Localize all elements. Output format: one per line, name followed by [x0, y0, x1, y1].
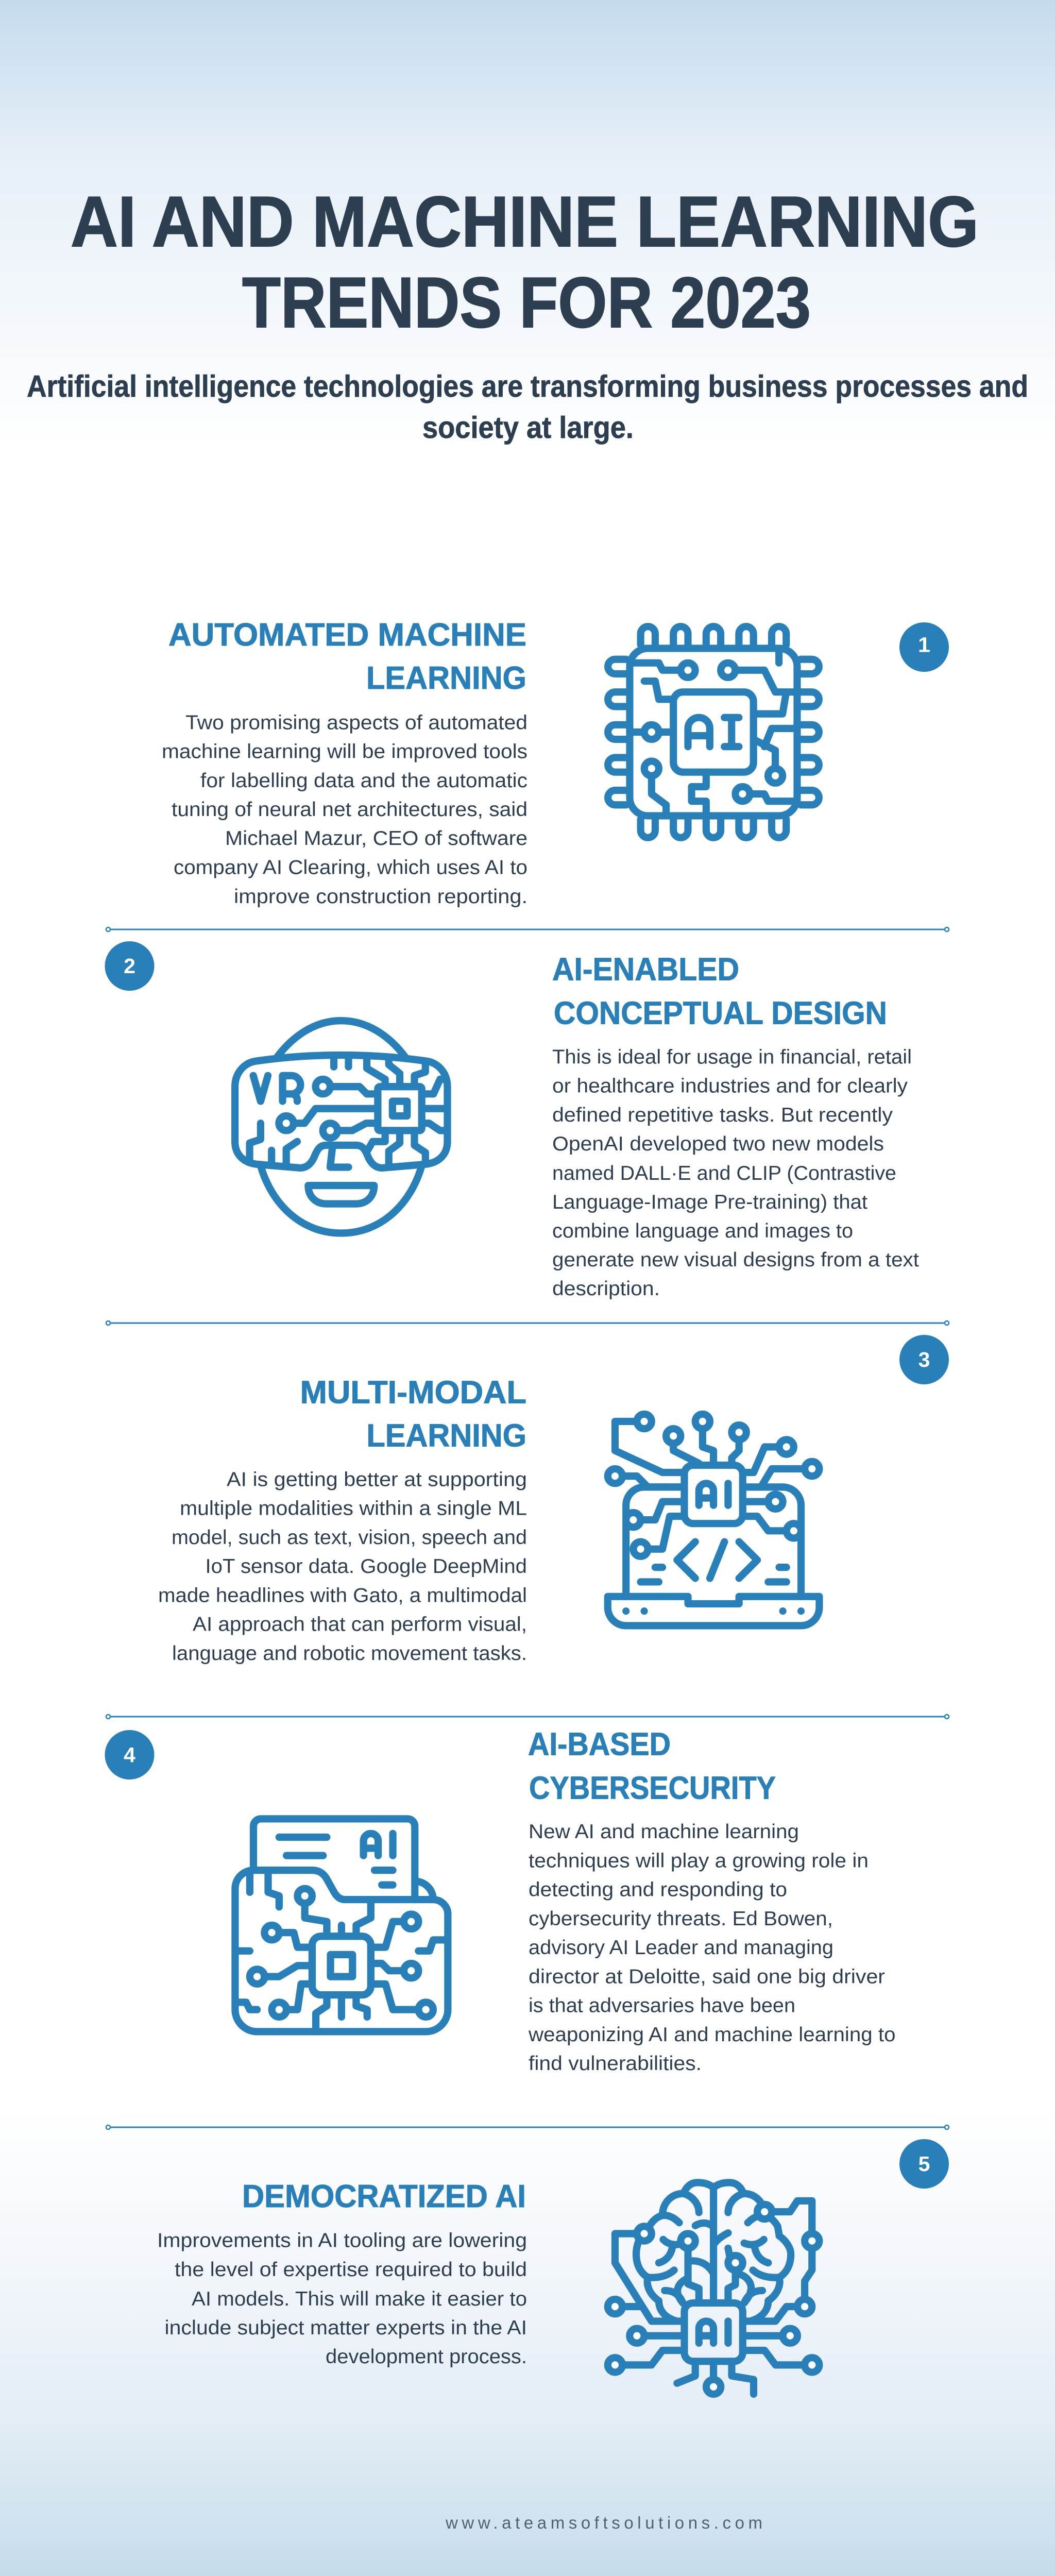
body text 4: techniques will play a growing role in — [529, 1850, 869, 1872]
body text 5: development process. — [326, 2346, 527, 2368]
heading 3 — [300, 1375, 526, 1454]
heading 2 — [552, 952, 887, 1031]
panel: democratized AI — [157, 2139, 949, 2394]
number badge 2: 2 — [124, 954, 135, 978]
subtitle — [27, 369, 1028, 445]
panel: AI-based cybersecurity — [105, 1727, 895, 2075]
body text 3: multiple modalities within a single ML — [180, 1497, 527, 1520]
body text 4: find vulnerabilities. — [529, 2053, 702, 2075]
number badge 5: 5 — [918, 2152, 930, 2176]
body text 3: made headlines with Gato, a multimodal — [158, 1585, 527, 1606]
title — [71, 182, 979, 343]
body text 4: is that adversaries have been — [529, 1995, 795, 2016]
divider 2 — [106, 1321, 949, 1325]
heading 4: AI-BASED — [528, 1727, 671, 1762]
icon: AI laptop — [608, 1414, 819, 1625]
number badge 3 — [899, 1335, 949, 1384]
body text 4: advisory AI Leader and managing — [529, 1937, 833, 1959]
body text 5 — [157, 2230, 527, 2368]
body text 1 — [162, 712, 528, 908]
panel: multi-modal learning — [158, 1335, 949, 1665]
number badge 4 — [105, 1730, 155, 1780]
body text 2: This is ideal for usage in financial, retail — [552, 1046, 912, 1069]
icon: AI folder — [235, 1819, 448, 2031]
body text 1: company AI Clearing, which uses AI to — [174, 856, 528, 879]
number badge 1: 1 — [918, 633, 930, 656]
number badge 3: 3 — [918, 1348, 930, 1371]
divider 3 — [106, 1715, 949, 1719]
body text 2: named DALL·E and CLIP (Contrastive — [552, 1162, 896, 1184]
subtitle: society at large. — [422, 411, 634, 445]
body text 4 — [528, 1821, 895, 2075]
icon: AI chip — [608, 626, 819, 838]
icon: AI brain — [608, 2182, 819, 2394]
title: TRENDS FOR 2023 — [242, 263, 811, 343]
body text 2: generate new visual designs from a text — [552, 1249, 919, 1271]
heading 3: MULTI-MODAL — [300, 1375, 526, 1411]
body text 2: or healthcare industries and for clearly — [552, 1075, 908, 1097]
body text 2: description. — [552, 1278, 660, 1300]
divider 1 — [106, 927, 949, 931]
heading 4 — [528, 1727, 776, 1806]
body text 1: Michael Mazur, CEO of software — [225, 827, 528, 850]
body text 4: detecting and responding to — [529, 1878, 787, 1901]
body text 1: tuning of neural net architectures, said — [172, 799, 528, 821]
footer website: www.ateamsoftsolutions.com — [445, 2513, 762, 2532]
body text 5: Improvements in AI tooling are lowering — [157, 2230, 527, 2251]
body text 3: model, such as text, vision, speech and — [172, 1527, 527, 1549]
icon: VR headset face — [235, 1021, 447, 1233]
body text 3 — [158, 1468, 527, 1665]
body text 2 — [552, 1046, 919, 1300]
body text 2: Language-Image Pre-training) that — [552, 1191, 867, 1213]
body text 4: weaponizing AI and machine learning to — [528, 2024, 895, 2046]
body text 5: include subject matter experts in the AI — [165, 2317, 527, 2339]
heading 2: CONCEPTUAL DESIGN — [554, 995, 887, 1031]
divider 4 — [106, 2125, 949, 2129]
heading 4: CYBERSECURITY — [529, 1770, 776, 1806]
body text 2: combine language and images to — [552, 1220, 853, 1242]
heading 3: LEARNING — [367, 1418, 526, 1454]
number badge 4: 4 — [124, 1743, 135, 1767]
body text 2: OpenAI developed two new models — [552, 1133, 884, 1155]
number badge 5 — [899, 2139, 949, 2189]
heading 5: DEMOCRATIZED AI — [242, 2179, 526, 2214]
heading 1 — [168, 617, 526, 696]
title: AI AND MACHINE LEARNING — [71, 182, 979, 262]
body text 5: the level of expertise required to build — [175, 2259, 527, 2281]
body text 1: machine learning will be improved tools — [162, 741, 528, 762]
body text 4: director at Deloitte, said one big driver — [529, 1966, 885, 1988]
panel: automated machine learning — [162, 617, 949, 908]
panel: AI-enabled conceptual design — [105, 941, 919, 1300]
body text 2: defined repetitive tasks. But recently — [552, 1104, 893, 1126]
body text 1: improve construction reporting. — [234, 886, 528, 908]
body text 1: Two promising aspects of automated — [185, 712, 528, 734]
heading 2: AI-ENABLED — [552, 952, 739, 987]
heading 1: AUTOMATED MACHINE — [168, 617, 526, 653]
body text 3: AI is getting better at supporting — [227, 1468, 527, 1491]
body text 5: AI models. This will make it easier to — [192, 2288, 527, 2310]
body text 1: for labelling data and the automatic — [200, 770, 528, 792]
body text 4: New AI and machine learning — [529, 1821, 799, 1843]
body text 4: cybersecurity threats. Ed Bowen, — [529, 1908, 833, 1930]
body text 3: IoT sensor data. Google DeepMind — [205, 1555, 527, 1578]
number badge 1 — [899, 622, 949, 672]
number badge 2 — [105, 941, 155, 991]
heading 1: LEARNING — [366, 660, 526, 696]
body text 3: AI approach that can perform visual, — [193, 1614, 527, 1635]
body text 3: language and robotic movement tasks. — [172, 1642, 527, 1665]
